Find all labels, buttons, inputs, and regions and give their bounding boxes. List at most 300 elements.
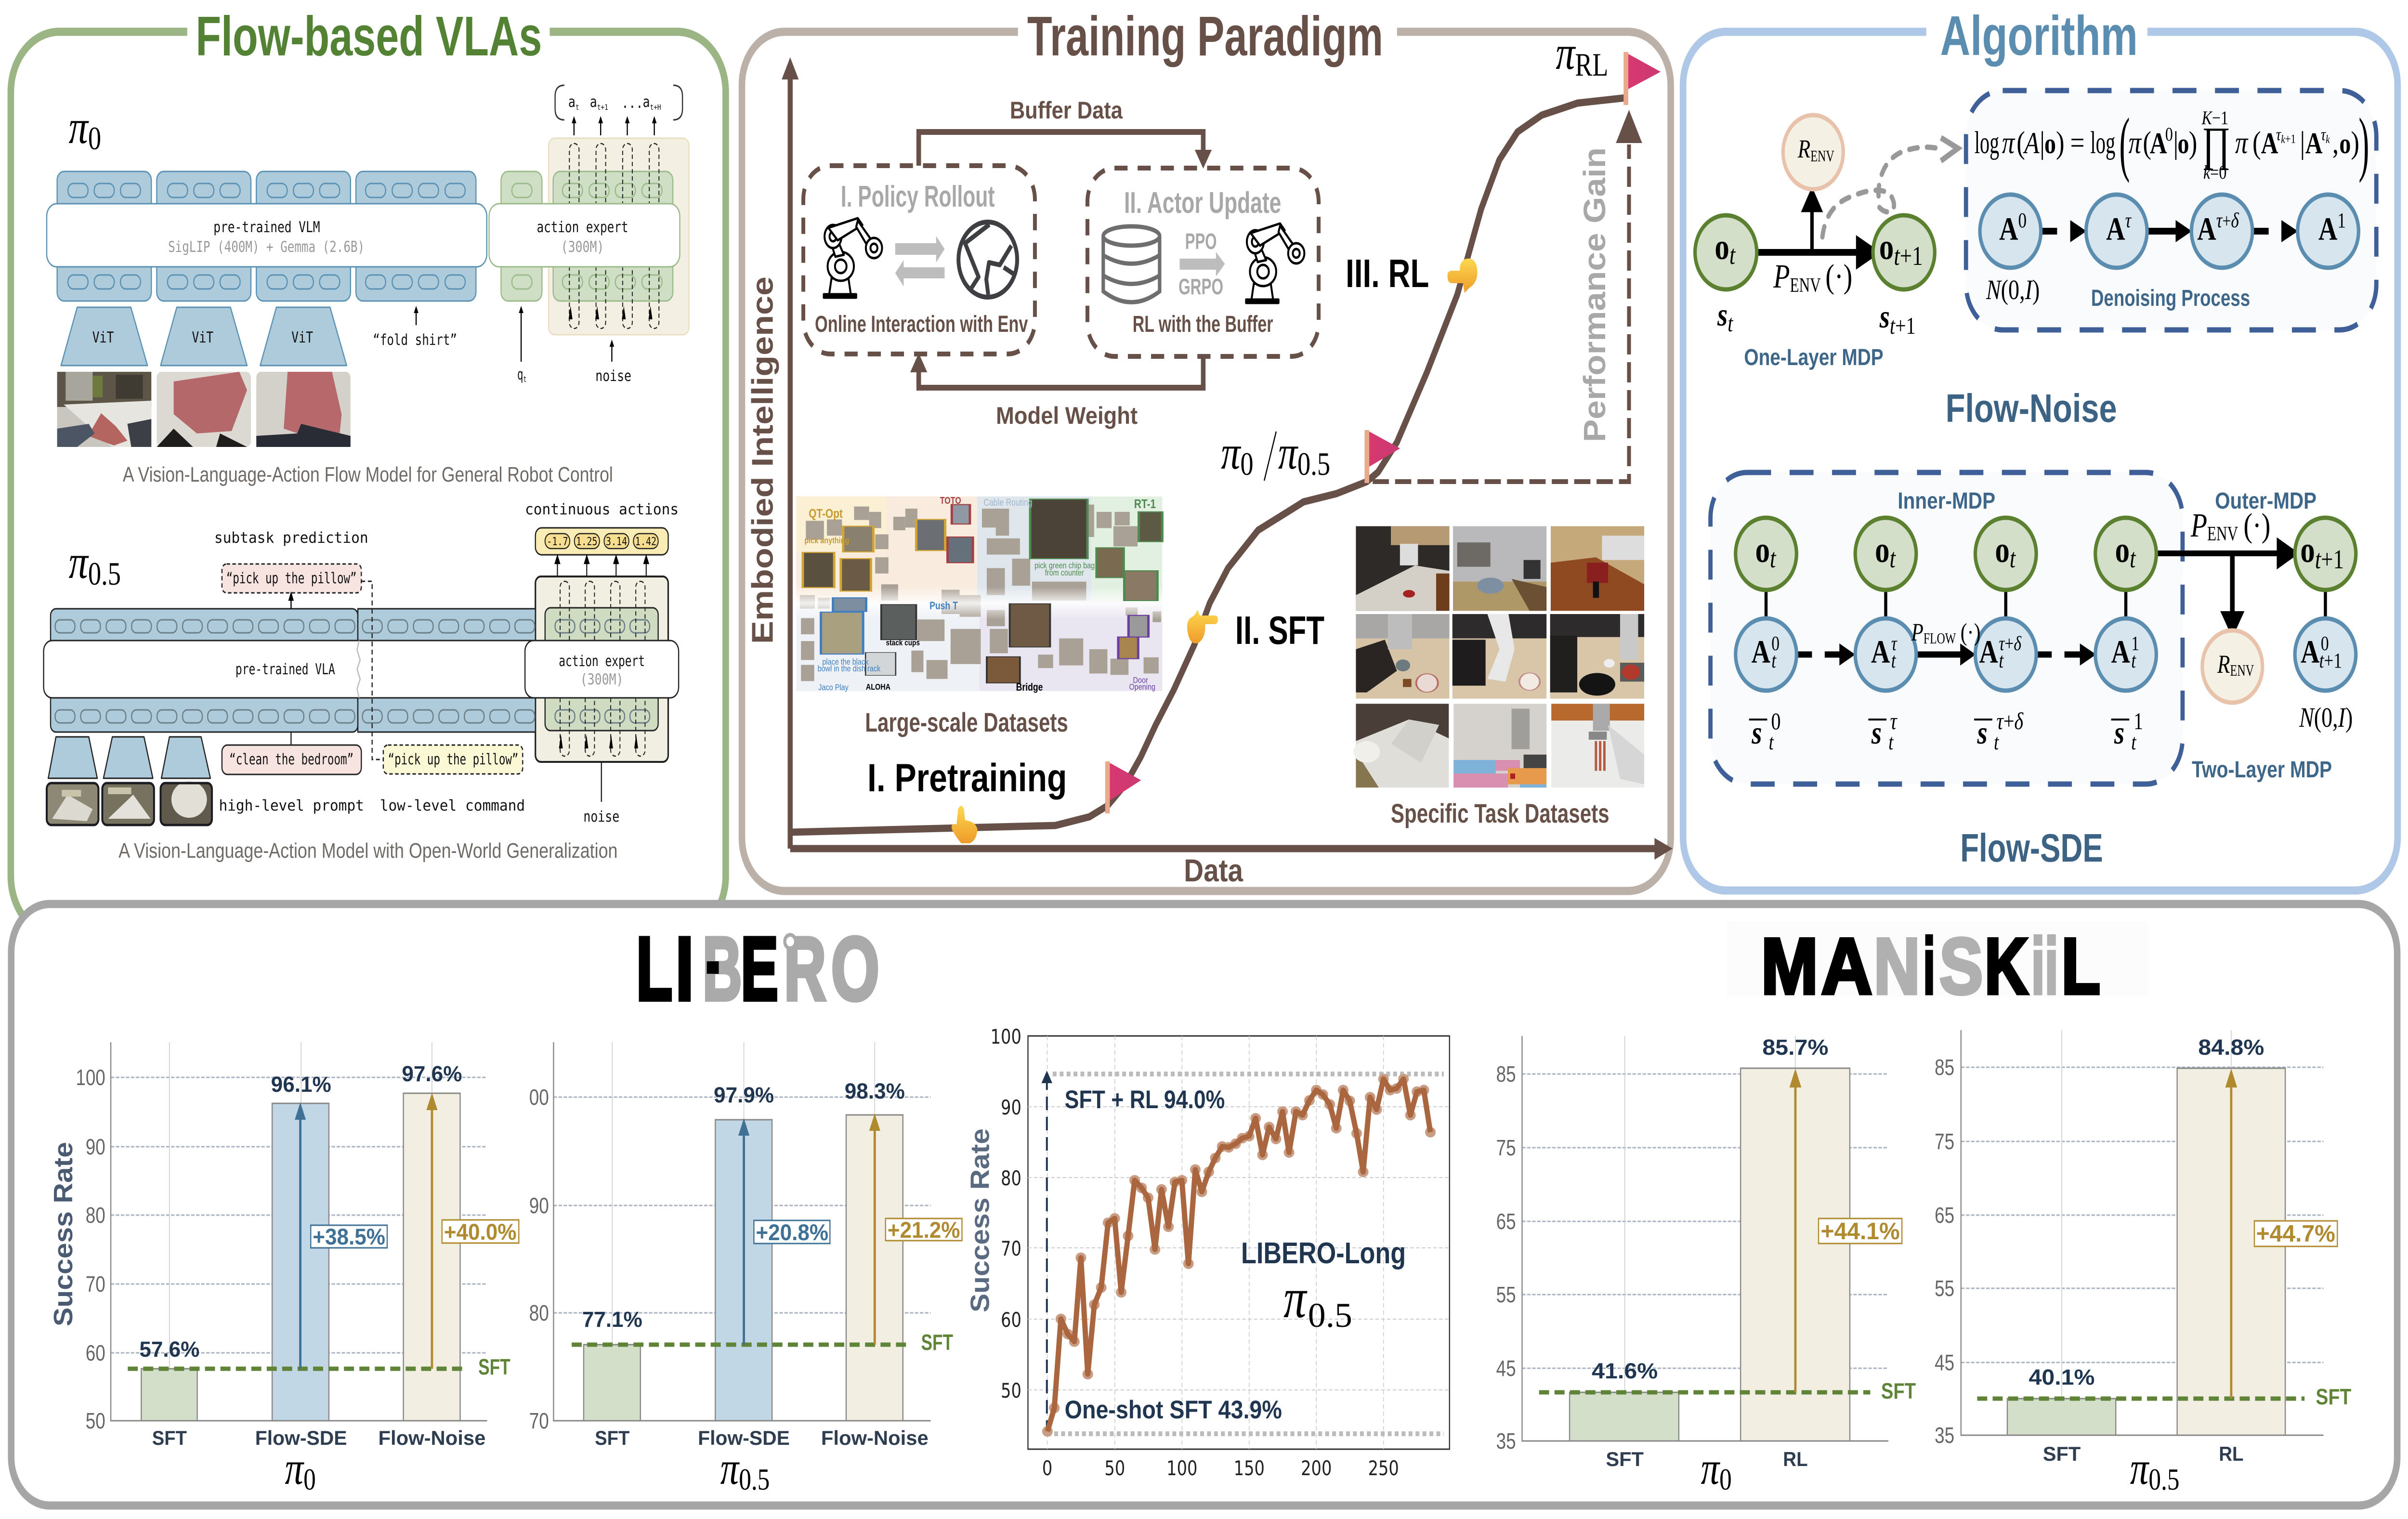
node: o_t+1	[1873, 215, 1935, 289]
formula: log probability: A	[2261, 127, 2278, 160]
label: buffer data: Buffer Data	[1010, 97, 1123, 124]
label: pi0 / pi0.5: π	[1278, 426, 1297, 479]
heading: Flow-SDE: Flow-SDE	[1960, 825, 2103, 870]
logo: LIBERO: B	[703, 918, 742, 1019]
formula: log probability: (	[2016, 125, 2025, 160]
vertical grid	[1625, 1036, 1795, 1441]
callout: +44.1%: +44.1%	[1820, 1218, 1900, 1244]
text: pre-trained VLA: pre-trained VLA	[236, 660, 335, 678]
text: action expert: action expert	[537, 218, 628, 236]
labels: observation row: t	[1770, 543, 1777, 573]
formula: log probability: log	[2090, 125, 2115, 160]
action expert background	[549, 138, 689, 335]
output values box: 1.25	[576, 535, 598, 548]
image: large-scale datasets collage: ALOHA	[866, 682, 890, 692]
label: two-layer MDP: Two-Layer MDP	[2192, 757, 2332, 783]
diagram: one-layer MDP	[1695, 115, 1935, 370]
label: SFT baseline: SFT	[2316, 1384, 2351, 1409]
chart: ManiSkill pi0	[1496, 1035, 1916, 1496]
grid	[1522, 1074, 1888, 1368]
labels: observation row: o	[1995, 530, 2010, 570]
category labels: SFT	[2043, 1443, 2081, 1466]
box: low-level command: “pick up the pillow”	[388, 750, 518, 768]
callout: +44.7%: +44.7%	[2256, 1221, 2335, 1247]
arrow: buffer data	[919, 132, 1212, 169]
box: predicted subtask	[222, 564, 361, 593]
diagram: pi0.5 architecture	[44, 500, 679, 863]
text: action expert: action expert	[559, 652, 645, 670]
logo: LIBERO: E	[741, 918, 778, 1019]
node: A1	[2298, 195, 2358, 268]
formula: log probability: o	[2177, 128, 2189, 159]
node: A tau: A	[2106, 211, 2125, 247]
heading: Flow-based VLAs: Flow-based VLAs	[196, 5, 542, 67]
logo: ManiSkill	[1726, 922, 2148, 1010]
formula: log probability	[1975, 104, 2369, 184]
y tick labels: 80	[86, 1203, 105, 1228]
x tick labels	[1042, 1456, 1399, 1480]
label: pi RL: π	[1556, 26, 1575, 79]
label: pi0.5: 0.5	[1308, 1296, 1352, 1335]
label: pi 0.5: π	[69, 535, 88, 589]
formula: log probability: o	[2339, 128, 2351, 159]
y tick labels: 85	[1935, 1055, 1954, 1080]
value labels: 96.1%	[271, 1072, 331, 1097]
labels: observation row: t	[2010, 543, 2016, 573]
value labels: 97.6%	[402, 1061, 462, 1086]
output values box: 3.14	[606, 535, 627, 548]
callout: +40.0%: +40.0%	[444, 1219, 516, 1245]
category labels	[152, 1427, 485, 1450]
category labels: RL	[1783, 1449, 1808, 1471]
ViT encoders	[61, 307, 347, 366]
y tick labels	[76, 1065, 105, 1433]
y tick labels: 00	[529, 1085, 549, 1110]
labels: state row: s	[1977, 715, 1988, 751]
node: R_ENV	[2202, 630, 2263, 703]
chart: LIBERO-Long learning curve	[966, 1025, 1450, 1480]
labels: state row: 0	[1771, 708, 1780, 734]
value labels: 77.1%	[582, 1307, 642, 1332]
dashed performance gain path	[1373, 144, 1629, 482]
label: outer MDP: Outer-MDP	[2215, 488, 2316, 514]
panel: training paradigm	[742, 5, 1673, 891]
text: pre-trained VLM: pre-trained VLM	[213, 218, 320, 236]
bar: SFT	[584, 1345, 641, 1421]
axes	[111, 1042, 487, 1421]
y tick labels: 50	[1001, 1379, 1021, 1402]
y tick labels: 45	[1935, 1350, 1954, 1375]
arrow: outer transition	[2157, 542, 2294, 632]
arrow: Flow-SDE gain	[297, 1106, 304, 1369]
text: online interaction: Online Interaction with Env	[815, 312, 1028, 337]
arrow: improvement	[1042, 1071, 1052, 1434]
label: normal distribution: N(0,I)	[2299, 702, 2353, 733]
grid	[553, 1097, 931, 1313]
labels: action row: 1	[2131, 633, 2139, 655]
labels: action row: t	[1999, 648, 2004, 672]
arrow: q_t and noise inputs	[414, 116, 656, 362]
arrow: RL gain	[1791, 1073, 1800, 1392]
label: P_FLOW: FLOW	[1924, 630, 1956, 647]
labels: state row: t	[2131, 730, 2137, 755]
token blocks	[51, 608, 658, 732]
arrow heads: flow chain	[1839, 643, 2096, 666]
category labels: SFT	[595, 1427, 629, 1450]
text: 300M: (300M)	[580, 670, 623, 688]
SFT baseline	[572, 1343, 909, 1347]
ViT encoders: ViT	[192, 328, 213, 346]
label: SFT baseline: SFT	[921, 1330, 953, 1355]
chart: LIBERO pi0.5	[529, 1042, 962, 1496]
labels: state row: τ+δ	[1997, 708, 2024, 734]
label: pi0 / pi0.5	[1221, 426, 1330, 482]
small input arrows	[559, 734, 638, 748]
connectors	[1766, 590, 2325, 619]
callout: +20.8%: +20.8%	[756, 1220, 828, 1245]
image: large-scale datasets collage: Bridge	[1016, 681, 1043, 694]
formula: log probability: |	[2173, 125, 2178, 160]
formula: log probability: o	[2044, 128, 2056, 159]
output values box: -1.7	[547, 535, 568, 548]
icon: hand II	[1187, 610, 1218, 643]
text: continuous actions: continuous actions	[525, 500, 679, 518]
dashed flow loops	[569, 144, 659, 328]
ViT encoders: ViT	[291, 328, 313, 346]
text: GRPO: GRPO	[1178, 274, 1223, 299]
label: s_t+1: t	[1890, 313, 1896, 339]
formula: log probability: π	[2129, 125, 2142, 160]
category labels: Flow-SDE	[698, 1427, 790, 1450]
image: large-scale datasets collage: TOTO	[940, 495, 961, 506]
dashed flow loops	[560, 581, 645, 756]
label: s_t+1: +1	[1895, 313, 1916, 339]
y tick labels: 80	[1001, 1166, 1021, 1190]
logo: ManiSkill: ii	[2031, 922, 2058, 1010]
label: large-scale datasets: Large-scale Datasets	[865, 707, 1068, 737]
y axis title: Success Rate	[966, 1128, 995, 1312]
bar: SFT	[1570, 1392, 1679, 1441]
category labels	[1606, 1449, 1808, 1471]
labels: state row: s	[1871, 715, 1882, 751]
formula: log probability: A	[2305, 127, 2323, 160]
labels: observation row: t	[1890, 543, 1897, 573]
bar: SFT	[2007, 1399, 2116, 1435]
logo: ManiSkill: N	[1874, 922, 1920, 1010]
labels: action row: t	[1771, 648, 1777, 672]
photos: folding shirt	[57, 372, 351, 447]
arrow: subtask up	[289, 593, 293, 609]
box: policy rollout	[803, 166, 1035, 354]
labels: action row: A	[1871, 634, 1890, 670]
formula: log probability: (	[2119, 104, 2130, 184]
formula: log probability: π	[2235, 125, 2249, 160]
y tick labels	[529, 1085, 549, 1433]
label: P_ENV: P	[1773, 257, 1790, 295]
logo: ManiSkill: L	[2061, 922, 2100, 1010]
image: large-scale datasets collage: place the black	[822, 657, 869, 667]
formula: log probability: )	[2358, 104, 2369, 184]
arrow: Flow-Noise gain	[871, 1117, 878, 1345]
value labels: 84.8%	[2198, 1035, 2264, 1060]
formula: log probability: ,	[2332, 125, 2339, 160]
formula: log probability: +1	[2285, 132, 2296, 146]
labels: action row	[1752, 633, 2342, 672]
token pills	[55, 620, 650, 723]
image: large-scale datasets collage: Jaco Play	[818, 683, 849, 692]
panel: algorithm	[1683, 5, 2397, 890]
formula: log probability: |	[2300, 125, 2305, 160]
node: R_ENV	[1783, 115, 1843, 189]
logo: ManiSkill: i	[1923, 922, 1935, 1010]
image: large-scale datasets collage: Cable Routing	[983, 497, 1033, 508]
y tick labels: 70	[1001, 1237, 1021, 1260]
y tick labels: 80	[529, 1300, 549, 1325]
labels: action row: 0	[1771, 633, 1780, 655]
node: o_t: t	[1729, 240, 1736, 270]
bar: Flow-Noise	[846, 1115, 903, 1421]
labels: action row: τ	[1891, 633, 1898, 655]
image: large-scale datasets collage: pick green chip bag	[1034, 561, 1095, 570]
arrow heads: denoising chain	[2070, 220, 2298, 242]
callout: +21.2%: +21.2%	[888, 1218, 960, 1243]
node: A tau: τ	[2125, 208, 2132, 232]
y tick labels	[1496, 1061, 1516, 1454]
arrow head: performance gain	[1616, 110, 1642, 143]
diagram: two-layer MDP	[1711, 472, 2356, 784]
labels: action row: A	[1752, 634, 1770, 670]
labels: action row: t+1	[2319, 648, 2342, 672]
x tick labels: 50	[1104, 1456, 1125, 1480]
annotation: SFT + RL: SFT + RL 94.0%	[1065, 1086, 1225, 1114]
flag: pi RL	[1623, 52, 1661, 105]
value labels: 98.3%	[845, 1079, 905, 1103]
icon: database	[1103, 226, 1160, 302]
logo: ManiSkill: S	[1939, 922, 1983, 1010]
x tick labels: 100	[1166, 1456, 1197, 1480]
node: o_t+1: o	[1879, 227, 1894, 267]
node: A tau+delta: A	[2197, 211, 2216, 247]
SFT baseline	[1977, 1397, 2304, 1401]
value labels	[2028, 1035, 2264, 1389]
axis: data	[790, 838, 1673, 860]
y tick labels: 75	[1496, 1135, 1516, 1160]
VLM token blocks	[57, 171, 673, 301]
bar: SFT	[141, 1369, 197, 1421]
label: II. SFT: II. SFT	[1235, 608, 1324, 653]
formula: log probability: log	[1975, 125, 1999, 160]
y tick labels	[991, 1025, 1021, 1402]
label: P_ENV: P	[2191, 506, 2207, 544]
text: q_t: q	[517, 366, 524, 383]
heading: Algorithm: Algorithm	[1940, 5, 2138, 67]
y tick labels: 60	[1001, 1308, 1021, 1332]
logo: LIBERO: L	[636, 918, 672, 1019]
node: R_ENV: ENV	[2230, 661, 2254, 680]
axis: embodied intelligence	[782, 57, 798, 849]
label: pi0.5: 0.5	[2148, 1462, 2180, 1496]
y tick labels	[1935, 1055, 1954, 1448]
image: large-scale datasets collage: stack cups	[886, 639, 920, 647]
text: q_t: t	[523, 375, 526, 384]
frame	[1028, 1036, 1450, 1449]
box: predicted subtask: “pick up the pillow”	[226, 569, 357, 587]
labels: observation row: o	[1875, 530, 1890, 570]
arrow: Flow-SDE gain	[740, 1122, 748, 1345]
formula: log probability: (	[2143, 125, 2151, 160]
label: SFT baseline: SFT	[478, 1354, 510, 1379]
value labels	[139, 1061, 462, 1362]
formula: log probability: )	[2056, 125, 2065, 160]
category labels: Flow-Noise	[379, 1427, 485, 1450]
y tick labels: 70	[529, 1408, 549, 1433]
labels: state row: t	[1888, 730, 1894, 755]
y tick labels: 55	[1496, 1282, 1516, 1307]
category labels	[595, 1427, 929, 1450]
y tick labels: 70	[86, 1271, 105, 1296]
label: performance gain: Performance Gain	[1577, 147, 1612, 442]
category labels: Flow-SDE	[255, 1427, 347, 1450]
image: large-scale datasets collage: QT-Opt	[809, 507, 843, 521]
label: pi 0.5: 0.5	[88, 556, 121, 592]
label: pi0.5: π	[720, 1442, 739, 1494]
labels: action row: A	[2111, 634, 2130, 670]
node: o_t+1: t	[1894, 241, 1901, 271]
labels: observation row: o	[2300, 530, 2315, 570]
labels: state row: τ	[1890, 708, 1898, 734]
y tick labels: 55	[1935, 1276, 1954, 1301]
arrow: transition	[1757, 241, 1875, 264]
label: pi RL: RL	[1575, 47, 1608, 83]
y tick labels: 90	[529, 1193, 549, 1218]
labels: state row	[1749, 708, 2143, 755]
y tick labels: 35	[1935, 1423, 1954, 1448]
box: denoising process	[1966, 91, 2376, 330]
node: o_t+1: +1	[1900, 241, 1923, 271]
bar: Flow-Noise	[404, 1093, 460, 1421]
image: large-scale datasets collage: Door	[1133, 676, 1148, 685]
label: I. Pretraining: I. Pretraining	[867, 756, 1067, 800]
bar: Flow-SDE	[272, 1103, 329, 1421]
image: large-scale datasets collage: pick anything	[804, 536, 849, 545]
flag: pi0 pi0.5	[1364, 430, 1400, 483]
label: P_ENV: (·)	[2243, 506, 2270, 544]
node: A tau+delta: +δ	[2222, 208, 2239, 232]
labels: action row: 0	[2321, 633, 2329, 655]
labels: observation row	[1755, 530, 2344, 574]
label: pi0 / pi0.5: π	[1221, 426, 1240, 479]
category labels	[2043, 1443, 2244, 1466]
node: A1: 1	[2337, 208, 2346, 232]
text: low-level command: low-level command	[380, 797, 525, 814]
label: pi0.5: 0.5	[739, 1462, 770, 1496]
box: inner MDP	[1711, 472, 2183, 784]
block: pre-trained VLM	[47, 204, 487, 267]
arrows: denoising chain	[2041, 228, 2269, 235]
formula: log probability: k=0	[2203, 162, 2226, 183]
formula: log probability: k	[2326, 133, 2330, 146]
output action bracket: ...	[621, 94, 643, 112]
bar: RL	[1741, 1068, 1850, 1441]
logo: ManiSkill: M	[1761, 922, 1818, 1010]
formula: log probability: ∏	[2202, 118, 2230, 170]
label: denoising process: Denoising Process	[2091, 286, 2250, 311]
y tick labels: 65	[1935, 1203, 1954, 1228]
image: large-scale datasets collage: from counter	[1045, 568, 1084, 577]
reference line: one-shot SFT	[1047, 1431, 1444, 1436]
node: R_ENV: ENV	[1810, 147, 1834, 165]
label: pi0 / pi0.5: 0.5	[1297, 446, 1330, 482]
label: P_ENV: ENV	[2207, 523, 2238, 545]
label: LIBERO-Long: LIBERO-Long	[1241, 1236, 1406, 1270]
callout: +38.5%: +38.5%	[313, 1224, 385, 1250]
label: specific task datasets: Specific Task Datasets	[1391, 798, 1610, 828]
divider between prompt and command tokens	[357, 641, 360, 698]
block: pre-trained VLA	[44, 641, 546, 698]
text: 300M: (300M)	[561, 238, 604, 256]
formula: log probability: |	[2040, 125, 2045, 160]
formula: log probability: )	[2351, 125, 2359, 160]
axes	[1522, 1036, 1888, 1441]
dashed connection	[361, 581, 383, 760]
logo: LIBERO: I	[676, 918, 694, 1019]
value labels	[1592, 1035, 1828, 1383]
encoders	[48, 737, 210, 778]
icon: robot arm	[824, 218, 882, 298]
node: A0	[1980, 195, 2041, 268]
vertical grid	[2062, 1030, 2231, 1435]
node: R_ENV: R	[1798, 134, 1810, 163]
output action bracket	[555, 85, 682, 120]
node: A1: A	[2318, 211, 2337, 247]
formula: log probability: τ	[2276, 125, 2281, 144]
y tick labels: 100	[76, 1065, 105, 1090]
icon: hand III	[1448, 259, 1478, 293]
label: pi0: 0	[303, 1462, 316, 1496]
text: subtask prediction: subtask prediction	[214, 529, 368, 547]
grid	[111, 1077, 487, 1353]
label: pi0: π	[285, 1442, 303, 1494]
value labels: 41.6%	[1592, 1359, 1658, 1383]
arrow: PPO GRPO	[1180, 252, 1225, 276]
y tick labels: 100	[991, 1025, 1021, 1048]
label: pi0 / pi0.5: 0	[1240, 446, 1254, 482]
labels: state row: s	[1751, 715, 1762, 751]
image: large-scale datasets collage: Opening	[1129, 682, 1155, 692]
heading: Flow-Noise: Flow-Noise	[1946, 386, 2117, 431]
output action bracket: t	[576, 104, 579, 112]
formula: log probability: 0	[2165, 124, 2173, 145]
formula: log probability: τ	[2321, 125, 2326, 144]
output values box: 1.42	[635, 535, 656, 548]
label: P_ENV: (·)	[1825, 257, 1852, 295]
label: pi0: 0	[1719, 1462, 1732, 1496]
labels: state row: 1	[2133, 708, 2143, 734]
formula: log probability: (	[2252, 125, 2261, 160]
node: A tau+delta	[2191, 195, 2252, 268]
label: normal distribution: N(0,I)	[1986, 275, 2040, 305]
node: A tau+delta: τ	[2216, 208, 2223, 232]
heading: actor update: II. Actor Update	[1124, 186, 1281, 219]
text: PPO: PPO	[1185, 229, 1217, 254]
category labels: SFT	[1606, 1449, 1644, 1471]
box: actor update	[1087, 168, 1319, 356]
value labels: 85.7%	[1762, 1035, 1828, 1060]
image: large-scale datasets collage	[796, 495, 1162, 694]
label: inner MDP: Inner-MDP	[1898, 488, 1995, 514]
annotation: one-shot SFT: One-shot SFT 43.9%	[1065, 1396, 1282, 1424]
y axis title: Success Rate	[49, 1142, 78, 1326]
